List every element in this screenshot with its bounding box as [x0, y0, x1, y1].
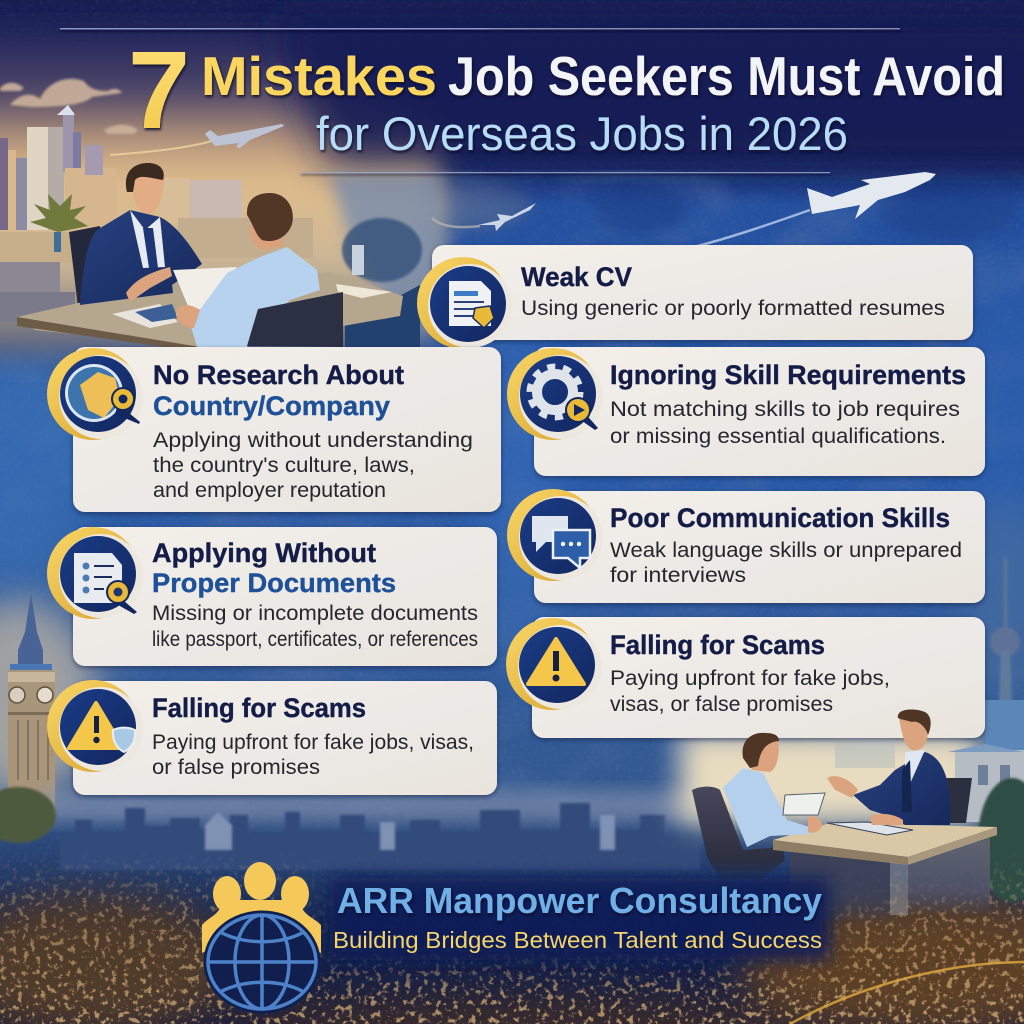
- description: or false promises: [152, 756, 320, 779]
- bottom right office backdrop: [680, 700, 1024, 902]
- card: No Research: [47, 347, 501, 512]
- description: [610, 539, 962, 587]
- tagline: Building Bridges Between Talent and Success: [333, 927, 822, 953]
- card: Falling for Scams right: [506, 617, 985, 738]
- skyline: [0, 105, 313, 322]
- card: Ignoring Skill Requirements: [507, 347, 985, 476]
- footer earth tones: [0, 895, 1024, 1024]
- icon: globe with magnifier: [47, 348, 143, 440]
- description: [152, 602, 478, 651]
- description: Paying upfront for fake jobs, visas,: [152, 731, 474, 754]
- plane small behind cards: [432, 396, 495, 405]
- icon: gear with play: [507, 348, 603, 440]
- clock tower: [8, 593, 55, 815]
- card: Poor Communication Skills: [507, 489, 985, 603]
- title navy band: [270, 14, 1024, 165]
- consultant: [827, 710, 972, 825]
- heading: Poor Communication Skills: [610, 503, 950, 533]
- footer ember texture: [0, 850, 1024, 1024]
- footer navy band: [330, 878, 830, 960]
- laptop: [827, 822, 913, 835]
- plane: [110, 124, 284, 155]
- icon: checklist with magnifier: [47, 527, 143, 619]
- card: Falling for Scams left: [47, 680, 497, 795]
- seated applicant chair: [692, 787, 785, 880]
- rule below: [300, 172, 830, 173]
- description: or missing essential qualifications.: [610, 425, 946, 448]
- world map silhouettes: [410, 178, 1020, 242]
- card: No Research: Country/Company: [153, 391, 390, 421]
- card: Applying Without Proper Documents: [47, 527, 497, 666]
- description: Weak language skills or unprepared: [610, 539, 962, 562]
- bottom right office scene: [692, 710, 997, 925]
- description: and employer reputation: [153, 479, 386, 502]
- heading: Applying Without: [152, 538, 376, 568]
- bottom left trees: [0, 787, 56, 843]
- title line 1: Mistakes: [201, 45, 437, 107]
- icon: warning with shield: [47, 680, 143, 772]
- description: Not matching skills to job requires: [610, 398, 960, 421]
- description: Paying upfront for fake jobs,: [610, 667, 890, 690]
- interviewer in suit: [80, 163, 202, 305]
- heading: Weak CV: [521, 262, 632, 292]
- description: for interviews: [610, 564, 746, 587]
- description: [610, 398, 960, 448]
- clouds: [0, 79, 138, 134]
- icon: CV document: [417, 257, 512, 349]
- description: visas, or false promises: [610, 693, 833, 716]
- description: Applying without understanding: [153, 429, 473, 452]
- desk: [773, 823, 997, 925]
- footer logo: [202, 862, 321, 1010]
- description: [610, 667, 890, 716]
- icon: warning triangle: [506, 618, 602, 710]
- desk: [17, 272, 403, 347]
- description: [152, 731, 474, 779]
- description: Using generic or poorly formatted resumes: [521, 297, 945, 320]
- tablet: [783, 793, 825, 815]
- icon: globe: [207, 914, 317, 1010]
- plane middle: [432, 203, 536, 231]
- rule mid: [490, 28, 900, 30]
- rule top: [60, 28, 490, 30]
- description: [153, 429, 473, 502]
- heading: Falling for Scams: [152, 693, 366, 723]
- bottom city skyline: [40, 790, 700, 870]
- description: like passport, certificates, or references: [152, 628, 478, 651]
- icon: three people: [202, 862, 321, 953]
- top left city scene: [0, 14, 1024, 355]
- title line 2: for Overseas Jobs in 2026: [316, 107, 848, 160]
- card: Applying Without Proper Documents: Proper Documents: [152, 568, 396, 598]
- numeral 7: 7: [128, 29, 190, 152]
- plane right: [690, 172, 936, 248]
- applicant from behind: [176, 193, 343, 347]
- heading: Ignoring Skill Requirements: [610, 360, 966, 390]
- title: [60, 28, 1005, 173]
- light streak: [790, 962, 1024, 1024]
- description: Missing or incomplete documents: [152, 602, 478, 625]
- heading: Falling for Scams: [610, 630, 825, 660]
- description: the country's culture, laws,: [153, 454, 415, 477]
- seated applicant: [723, 733, 822, 847]
- desk items: [112, 245, 392, 328]
- icon: speech bubbles: [507, 489, 603, 581]
- tv tower: [990, 558, 1020, 752]
- palm: [30, 194, 88, 252]
- far trees and haze at right: [330, 175, 440, 355]
- heading: No Research About: [153, 360, 404, 390]
- card: Weak CV: [417, 245, 973, 349]
- chair interviewer: [69, 226, 110, 310]
- document: [173, 267, 237, 311]
- company name: ARR Manpower Consultancy: [337, 880, 822, 921]
